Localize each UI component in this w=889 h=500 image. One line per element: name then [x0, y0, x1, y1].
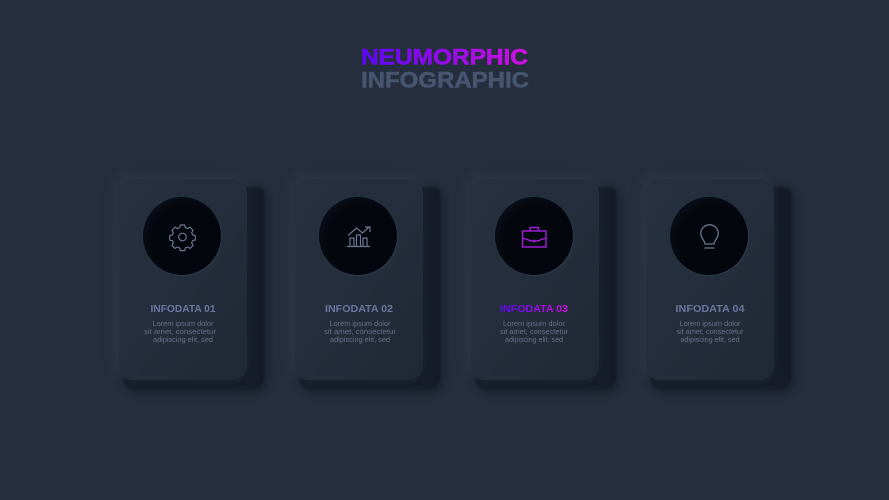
text: description 01: Lorem ipsum dolor: [152, 318, 214, 328]
text: description 02: adipiscing elit, sed: [330, 334, 390, 344]
text: description 02: [324, 318, 397, 344]
icon: growth chart: [347, 226, 371, 248]
icon: gear: [169, 224, 196, 252]
text: description 03: adipiscing elit, sed: [505, 334, 563, 344]
panel: infodata 01: [123, 186, 268, 394]
text: description 03: Lorem ipsum dolor: [503, 318, 566, 328]
text: description 04: [676, 318, 744, 344]
text: description 01: sit amet, consectetur: [144, 326, 217, 336]
icon: briefcase: [522, 226, 547, 248]
text: description 03: sit amet, consectetur: [500, 326, 569, 336]
text: description 04: Lorem ipsum dolor: [680, 318, 741, 328]
text: description 01: adipiscing elit, sed: [153, 334, 213, 344]
title: INFOGRAPHIC: [361, 68, 529, 92]
text: description 02: Lorem ipsum dolor: [330, 318, 391, 328]
panel: infodata 03: [475, 186, 620, 394]
title: [361, 44, 529, 92]
text: description 02: sit amet, consectetur: [324, 326, 397, 336]
panel: infodata 04: [650, 186, 795, 394]
title: NEUMORPHIC: [361, 44, 528, 70]
text: description 03: [500, 318, 569, 344]
text: description 04: adipiscing elit, sed: [680, 334, 740, 344]
text: description 04: sit amet, consectetur: [676, 326, 744, 336]
panel: infodata 02: [299, 186, 444, 394]
icon: light bulb: [700, 224, 719, 249]
text: description 01: [144, 318, 217, 344]
